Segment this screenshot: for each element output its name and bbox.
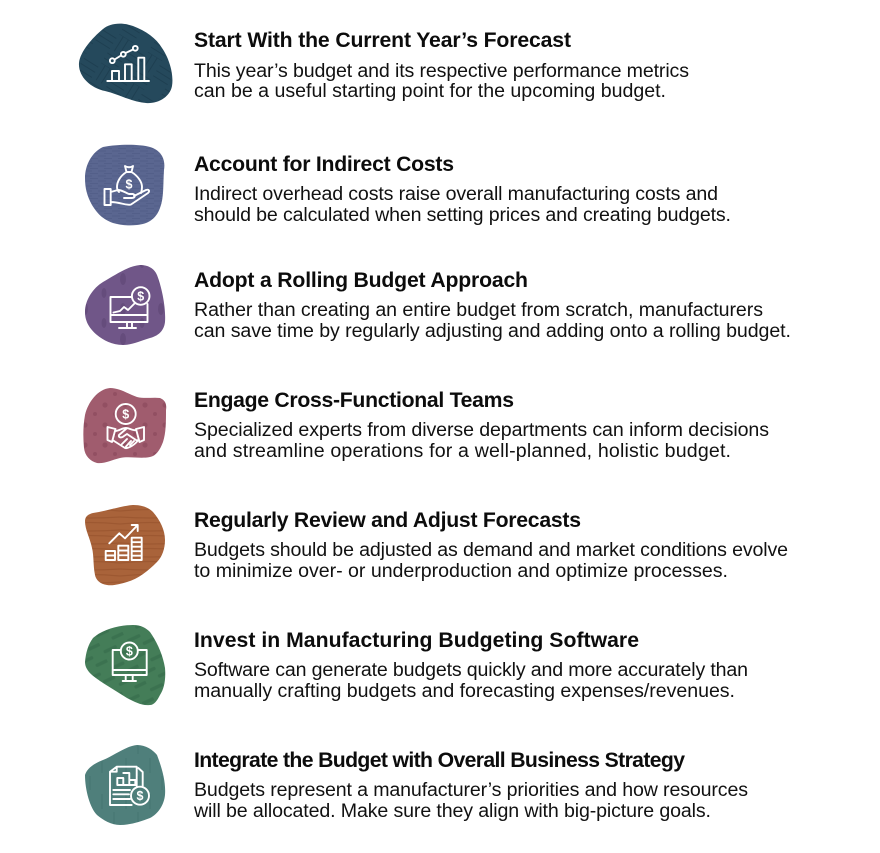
description: can save time by regularly adjusting and adding onto a rolling budget. [194, 320, 791, 342]
heading: Account for Indirect Costs [194, 153, 454, 176]
description: This year’s budget and its respective performance metrics [194, 60, 689, 82]
item: regularly review and adjust forecasts [85, 505, 788, 585]
heading: Invest in Manufacturing Budgeting Software [194, 629, 639, 652]
description: Rather than creating an entire budget from scratch, manufacturers [194, 299, 763, 321]
item: account for indirect costs [85, 145, 731, 226]
item: integrate the budget with overall business strategy [85, 745, 748, 825]
icon: monitor with dollar coin on green blob: $ [126, 644, 133, 658]
icon: handshake with coin on rose blob: $ [122, 408, 129, 422]
description [194, 539, 788, 582]
icon: report with dollar coin on teal blob [85, 745, 165, 825]
icon: money bag over hand on slate blob [85, 145, 164, 225]
icon: monitor with dollar coin on purple blob [85, 265, 165, 345]
description: Specialized experts from diverse departments can inform decisions [194, 419, 769, 441]
description: can be a useful starting point for the upcoming budget. [194, 80, 666, 102]
description: should be calculated when setting prices and creating budgets. [194, 204, 731, 226]
icon: rising stacks with arrow on brown blob [85, 505, 165, 585]
description [194, 183, 731, 226]
icon: report with dollar coin on teal blob: $ [137, 789, 144, 803]
heading: Integrate the Budget with Overall Business Strategy [194, 749, 685, 772]
item: engage cross-functional teams [83, 388, 769, 463]
icon: monitor with dollar coin on purple blob: $ [137, 290, 144, 304]
heading: Start With the Current Year’s Forecast [194, 29, 571, 52]
description: Budgets should be adjusted as demand and market conditions evolve [194, 539, 788, 561]
description: Software can generate budgets quickly and more accurately than [194, 659, 748, 681]
item: adopt a rolling budget approach [85, 265, 791, 345]
description [194, 299, 791, 342]
heading: Adopt a Rolling Budget Approach [194, 269, 528, 292]
item: start with the current year's forecast [79, 24, 689, 103]
description [193, 779, 748, 822]
icon: handshake with coin on rose blob [83, 388, 166, 463]
description: and streamline operations for a well-planned, holistic budget. [194, 440, 731, 462]
heading: Engage Cross-Functional Teams [194, 389, 514, 412]
item: invest in manufacturing budgeting software [85, 625, 748, 705]
description [194, 659, 748, 702]
description [194, 60, 689, 102]
heading: Regularly Review and Adjust Forecasts [194, 509, 581, 532]
icon: money bag over hand on slate blob: $ [126, 178, 133, 192]
icon: bar chart with trend line on navy blob [79, 24, 172, 103]
description: manually crafting budgets and forecasting expenses/revenues. [194, 680, 735, 702]
description: Indirect overhead costs raise overall manufacturing costs and [194, 183, 718, 205]
description: to minimize over- or underproduction and optimize processes. [194, 560, 728, 582]
description: will be allocated. Make sure they align with big-picture goals. [193, 800, 711, 822]
icon: monitor with dollar coin on green blob [85, 625, 165, 705]
description: Budgets represent a manufacturer’s priorities and how resources [194, 779, 748, 801]
description [194, 419, 769, 462]
